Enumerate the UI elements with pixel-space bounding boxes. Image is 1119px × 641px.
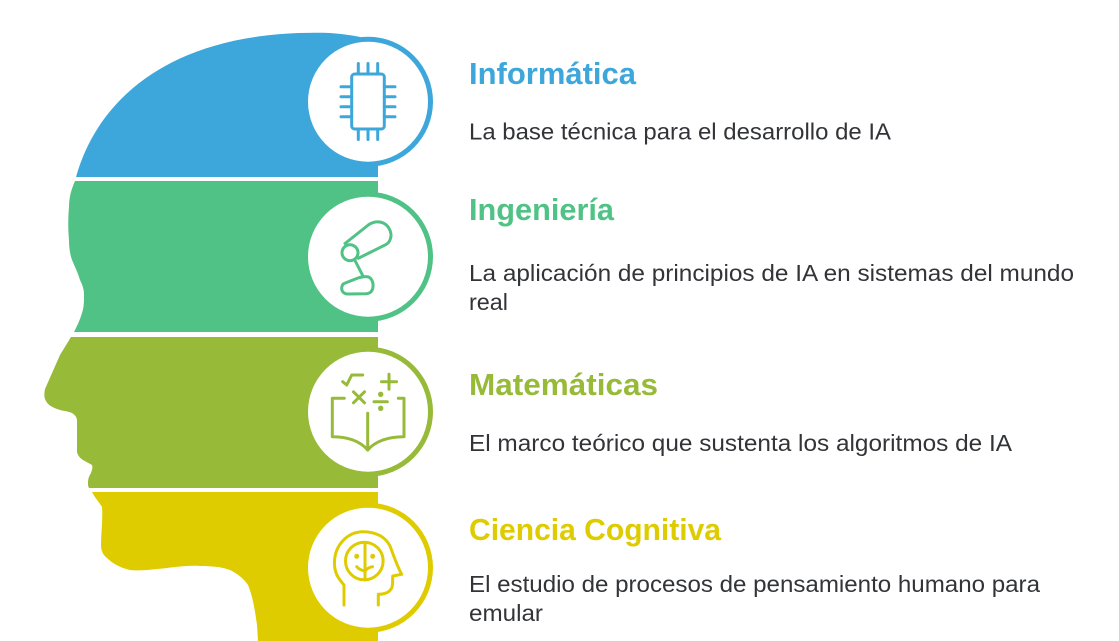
- description: Ciencia Cognitiva: emular: [469, 600, 543, 626]
- icon disc: [308, 42, 428, 162]
- icon: microchip: [341, 64, 395, 140]
- icon ring: [303, 37, 433, 167]
- icon disc: [308, 508, 428, 628]
- heading: Informática: Informática: [469, 56, 637, 91]
- description: Ingeniería: [469, 260, 1074, 315]
- panel: Ciencia Cognitiva: [92, 492, 1040, 641]
- heading: Ciencia Cognitiva: Ciencia Cognitiva: [469, 512, 722, 547]
- icon ring: [303, 503, 433, 633]
- description: Ciencia Cognitiva: El estudio de procesos de pensamiento humano para: [469, 571, 1040, 597]
- panel: Informática: [76, 33, 892, 177]
- description: Informática: La base técnica para el desarrollo de IA: [469, 118, 892, 144]
- icon: open book with math symbols: [332, 374, 404, 450]
- icon disc: [308, 197, 428, 317]
- heading: Matemáticas: Matemáticas: [469, 367, 658, 402]
- panel: Ingeniería: [68, 181, 1074, 332]
- description: Matemáticas: El marco teórico que sustenta los algoritmos de IA: [469, 430, 1013, 456]
- description: Ingeniería: real: [469, 289, 508, 315]
- icon disc: [308, 352, 428, 472]
- head segment: nose and mouth: [44, 337, 378, 488]
- icon ring: [303, 347, 433, 477]
- description: Ciencia Cognitiva: [469, 571, 1040, 626]
- head segment: forehead: [68, 181, 378, 332]
- icon: head with split face: [334, 532, 402, 605]
- head segment: crown: [76, 33, 378, 177]
- icon: robot arm: [342, 222, 391, 294]
- head segment: chin and neck: [92, 492, 378, 641]
- description: Ingeniería: La aplicación de principios de IA en sistemas del mundo: [469, 260, 1074, 286]
- heading: Ingeniería: Ingeniería: [469, 192, 615, 227]
- panel: Matemáticas: [44, 337, 1013, 488]
- icon ring: [303, 192, 433, 322]
